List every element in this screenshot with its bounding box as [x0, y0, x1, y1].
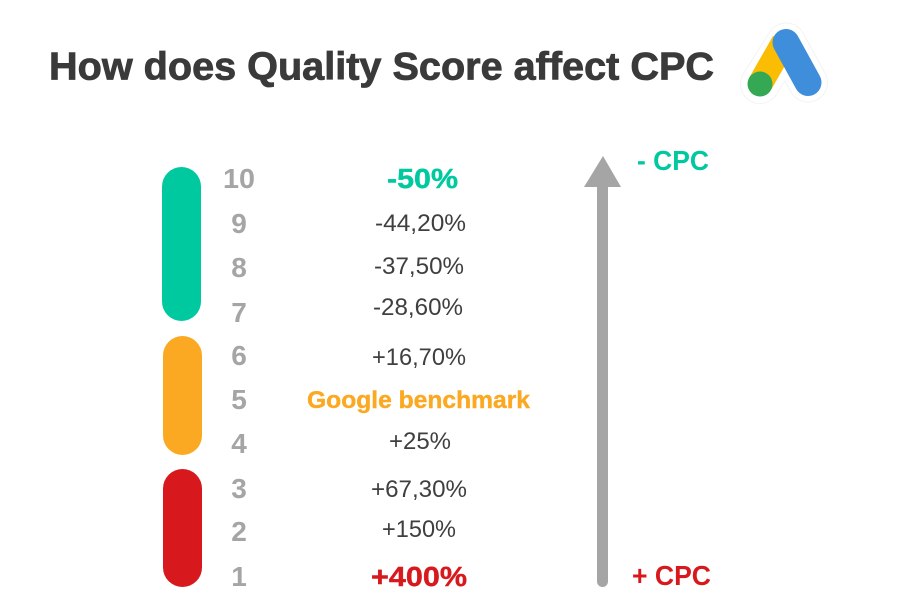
quality score numbers: 2 [231, 516, 247, 547]
quality score numbers: 9 [231, 208, 247, 239]
quality score numbers: 5 [231, 384, 247, 415]
CPC change values: Google benchmark [307, 387, 531, 414]
label: lower CPC: - CPC [637, 145, 709, 176]
quality score numbers: 10 [223, 163, 255, 194]
pill: high scores (green) [162, 167, 201, 321]
icon: Google Ads logo [748, 42, 808, 96]
CPC change values: -37,50% [374, 253, 464, 280]
title: How does Quality Score affect CPC [49, 46, 714, 88]
quality score numbers: 1 [231, 561, 247, 592]
pill: low scores (red) [163, 469, 202, 587]
CPC change values: +16,70% [372, 344, 466, 371]
CPC change values: +25% [389, 428, 451, 455]
CPC change values: -44,20% [375, 210, 466, 237]
pill: average scores (orange) [163, 336, 202, 455]
CPC change values: +67,30% [371, 476, 467, 503]
arrow: CPC direction [584, 156, 621, 587]
label: higher CPC: + CPC [632, 560, 711, 591]
CPC change values: +150% [382, 516, 456, 543]
quality score numbers: 8 [231, 252, 247, 283]
CPC change values: -28,60% [373, 294, 463, 321]
quality score numbers: 7 [231, 297, 247, 328]
CPC change values: -50% [387, 163, 458, 194]
quality score numbers: 6 [231, 340, 247, 371]
quality score numbers [223, 163, 255, 592]
quality score numbers: 3 [231, 473, 247, 504]
quality score numbers: 4 [231, 428, 247, 459]
CPC change values: +400% [371, 561, 467, 592]
CPC change values [307, 163, 531, 592]
